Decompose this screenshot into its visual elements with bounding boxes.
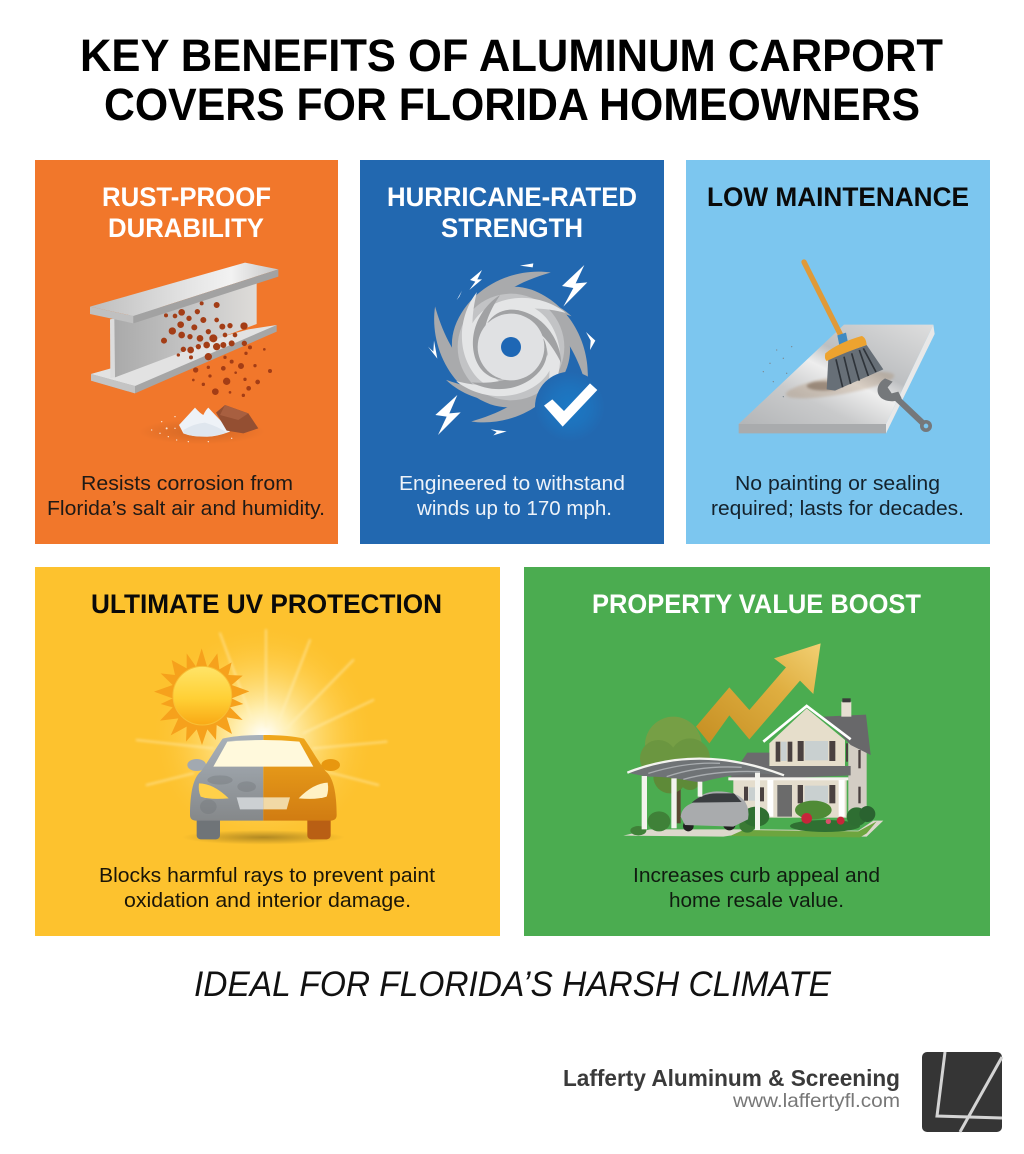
heading: property value boost: PROPERTY VALUE BOOST xyxy=(592,589,921,619)
garden and driveway xyxy=(623,801,883,837)
body text: UV: Blocks harmful rays to prevent paint xyxy=(99,864,435,887)
body text: property value xyxy=(633,864,880,912)
body text: low maintenance xyxy=(711,472,964,520)
dust xyxy=(784,366,896,404)
body text: rust-proof: Florida’s salt air and humidity. xyxy=(47,497,325,520)
rust particles xyxy=(161,302,272,397)
body text: rust-proof xyxy=(47,472,325,520)
heading: rust-proof durability: DURABILITY xyxy=(108,213,264,243)
check badge xyxy=(535,372,605,442)
tree xyxy=(640,717,710,823)
logo xyxy=(922,1052,1002,1132)
wrench xyxy=(878,378,932,432)
body text: rust-proof: Resists corrosion from xyxy=(81,472,293,495)
sun xyxy=(154,648,249,745)
salt and rock pile xyxy=(138,405,265,444)
tagline: IDEAL FOR FLORIDA’S HARSH CLIMATE xyxy=(194,965,832,1004)
broom xyxy=(804,262,841,335)
heading: ultimate UV protection: ULTIMATE UV PROTECTION xyxy=(91,589,442,619)
body text: hurricane: winds up to 170 mph. xyxy=(416,497,612,520)
icon: broom on metal plate with wrench xyxy=(739,262,935,433)
panel: property value boost xyxy=(524,567,990,936)
body text: hurricane: Engineered to withstand xyxy=(399,472,625,495)
body text: low maintenance: No painting or sealing xyxy=(735,472,940,495)
icon: sun and half-protected car xyxy=(137,623,387,850)
car xyxy=(681,791,749,831)
footer: company name and website: www.laffertyfl.com xyxy=(732,1090,900,1112)
body text: UV xyxy=(99,864,435,912)
panel: ultimate UV protection xyxy=(35,567,500,936)
title: COVERS FOR FLORIDA HOMEOWNERS xyxy=(104,79,920,130)
body text: property value: home resale value. xyxy=(669,889,844,912)
body text: UV: oxidation and interior damage. xyxy=(124,889,411,912)
heading: hurricane-rated strength: STRENGTH xyxy=(441,213,583,243)
lightning bolts and wind marks xyxy=(428,263,595,435)
body text: property value: Increases curb appeal and xyxy=(633,864,880,887)
panel: rust-proof durability xyxy=(35,160,338,544)
heading: rust-proof durability: RUST-PROOF xyxy=(102,182,271,212)
footer: company name and website: Lafferty Aluminum & Screening xyxy=(563,1065,900,1091)
icon: house, carport and rising arrow xyxy=(623,643,883,837)
heading: hurricane-rated strength: HURRICANE-RATED xyxy=(387,182,637,212)
icon: aluminum I-beam with rust and salt xyxy=(90,263,278,444)
footer: company name and website xyxy=(563,1065,900,1112)
icon: hurricane with check mark xyxy=(428,263,605,442)
body text: low maintenance: required; lasts for decades. xyxy=(711,497,964,520)
heading: rust-proof durability xyxy=(102,182,271,243)
heading: hurricane-rated strength xyxy=(387,182,637,243)
carport xyxy=(627,758,784,830)
rising arrow xyxy=(696,643,821,743)
car xyxy=(187,735,340,839)
panel: hurricane-rated strength xyxy=(360,160,664,544)
house xyxy=(728,698,871,818)
title: KEY BENEFITS OF ALUMINUM CARPORT xyxy=(80,30,943,81)
title xyxy=(80,30,943,130)
body text: hurricane xyxy=(399,472,625,520)
panel: low maintenance xyxy=(686,160,990,544)
heading: low maintenance: LOW MAINTENANCE xyxy=(707,182,969,212)
